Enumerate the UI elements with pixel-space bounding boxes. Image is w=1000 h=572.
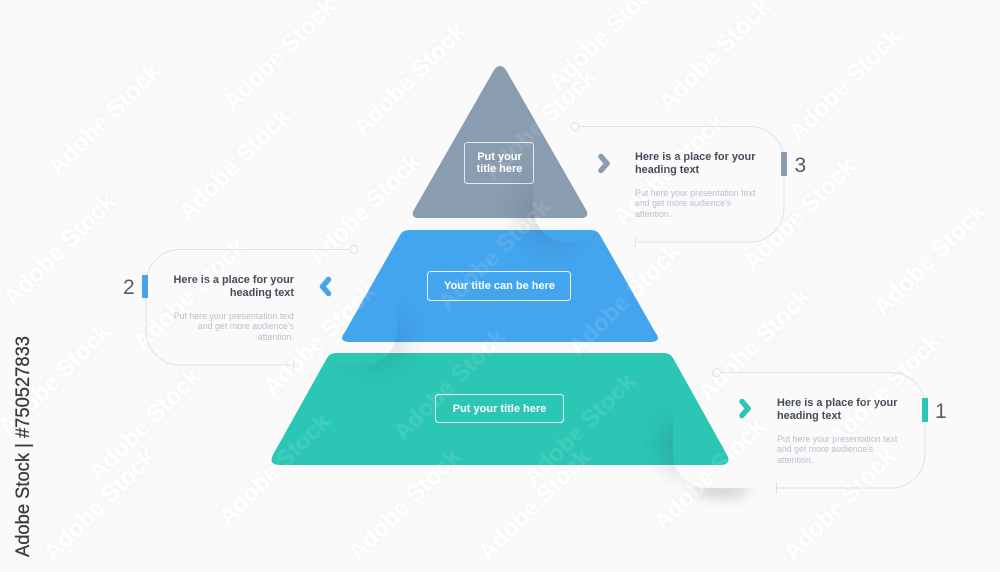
watermark pattern: Adobe Stock	[738, 153, 862, 276]
icon: chevron right	[742, 402, 748, 416]
body text 2: attention.	[258, 332, 294, 342]
number marker 3: 3	[794, 154, 806, 177]
watermark pattern: Adobe Stock	[83, 363, 207, 486]
number marker 1	[922, 398, 947, 423]
heading 3: Here is a place for your	[635, 151, 756, 163]
body text 1	[777, 434, 898, 465]
watermark pattern: Adobe Stock	[473, 443, 597, 566]
panel: pyramid bottom tier	[272, 353, 728, 465]
watermark pattern: Adobe Stock	[868, 198, 992, 321]
callout 3: top tier description	[571, 122, 806, 247]
heading 3	[635, 151, 756, 176]
body text 1: and get more audience's	[777, 444, 874, 454]
heading 1: Here is a place for your	[777, 397, 898, 409]
body text 1: Put here your presentation text	[777, 434, 898, 444]
watermark pattern: Adobe Stock	[823, 328, 947, 451]
body text 3	[635, 188, 756, 219]
label box: middle tier title	[428, 272, 570, 300]
label box: top tier title: Put your	[477, 151, 523, 163]
body text 3: attention.	[635, 209, 671, 219]
watermark pattern: Adobe Stock	[388, 323, 512, 446]
watermark pattern: Adobe Stock	[343, 443, 467, 566]
number marker 1: 1	[935, 400, 947, 423]
number marker 2: 2	[123, 276, 135, 299]
shadow of card 2	[360, 317, 411, 369]
heading 2: Here is a place for your	[174, 274, 295, 286]
side credit text: Adobe Stock | #750527833	[12, 336, 34, 557]
watermark pattern: Adobe Stock	[608, 108, 732, 231]
label box: bottom tier title	[436, 394, 564, 422]
body text 1: attention.	[777, 455, 813, 465]
connector outline 1	[712, 368, 925, 493]
callout 2: middle tier description	[123, 246, 358, 370]
watermark pattern: Adobe Stock	[783, 23, 907, 146]
watermark pattern: Adobe Stock	[518, 368, 642, 491]
watermark pattern: Adobe Stock	[258, 278, 382, 401]
watermark pattern: Adobe Stock	[693, 283, 817, 406]
heading 2: heading text	[230, 287, 294, 299]
connector outline 2	[146, 246, 358, 370]
label box: top tier title	[464, 142, 534, 184]
icon: chevron left	[322, 280, 328, 294]
watermark pattern: Adobe Stock	[38, 443, 162, 566]
body text 3: and get more audience's	[635, 198, 732, 208]
body text 2: and get more audience's	[198, 321, 295, 331]
panel: pyramid middle tier	[342, 230, 658, 342]
watermark pattern: Adobe Stock	[173, 103, 297, 226]
label box: middle tier title: Your title can be here	[444, 280, 555, 292]
heading 1: heading text	[777, 410, 842, 422]
heading 1	[777, 397, 898, 422]
heading 3: heading text	[635, 164, 700, 176]
watermark pattern: Adobe Stock	[303, 148, 427, 271]
soft shadow beneath card 1	[694, 482, 750, 498]
heading 2	[174, 274, 295, 299]
watermark pattern: Adobe Stock	[128, 233, 252, 356]
watermark pattern: Adobe Stock	[213, 408, 337, 531]
watermark pattern: Adobe Stock	[648, 413, 772, 536]
icon: chevron right	[601, 156, 607, 170]
body text 3: Put here your presentation text	[635, 188, 756, 198]
watermark pattern: Adobe Stock	[778, 443, 902, 566]
body text 2: Put here your presentation text	[174, 311, 295, 321]
watermark pattern: Adobe Stock	[478, 63, 602, 186]
watermark pattern: Adobe Stock	[43, 58, 167, 181]
watermark pattern: Adobe Stock	[563, 238, 687, 361]
shadow of card 3	[513, 192, 573, 248]
number marker 3	[781, 152, 806, 177]
watermark pattern: Adobe Stock	[0, 188, 122, 311]
label box: bottom tier title: Put your title here	[453, 403, 546, 415]
watermark pattern: Adobe Stock	[348, 18, 472, 141]
callout 1: bottom tier description	[712, 368, 947, 493]
shadow of card 1	[656, 416, 686, 481]
connector outline 3	[571, 122, 784, 247]
panel: pyramid top tier	[413, 66, 587, 218]
label box: top tier title: title here	[477, 163, 522, 175]
number marker 2	[123, 275, 148, 299]
watermark pattern: Adobe Stock	[433, 193, 557, 316]
body text 2	[174, 311, 295, 342]
